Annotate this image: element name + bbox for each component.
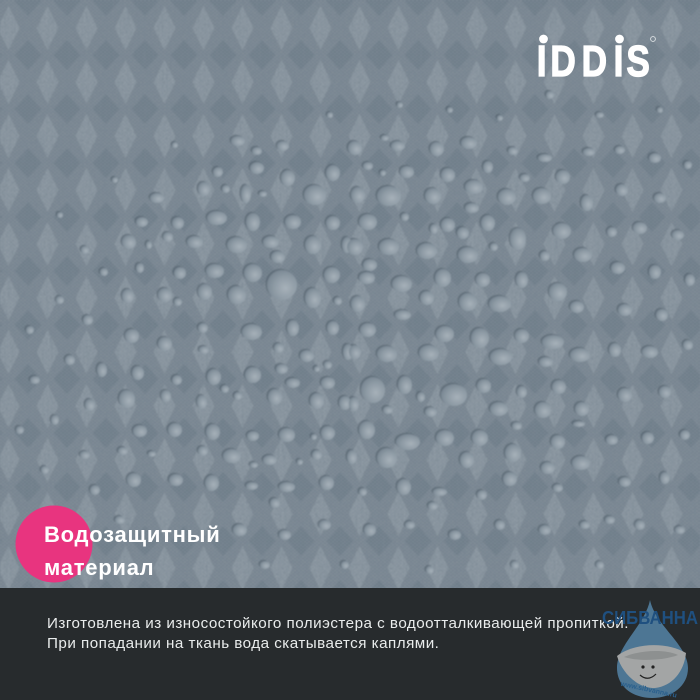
heading [44,522,220,580]
description text [47,615,629,652]
description text: Изготовлена из износостойкого полиэстера с водоотталкивающей пропиткой. [47,615,629,632]
watermark: bath in a water drop: www.sibvanna.ru [619,681,677,700]
description text: При попадании на ткань вода скатывается каплями. [47,635,439,652]
watermark: bath in a water drop [602,600,698,700]
heading: материал [44,555,154,580]
pink circle badge [16,506,92,582]
heading: Водозащитный [44,522,220,547]
dark text panel [0,588,700,700]
